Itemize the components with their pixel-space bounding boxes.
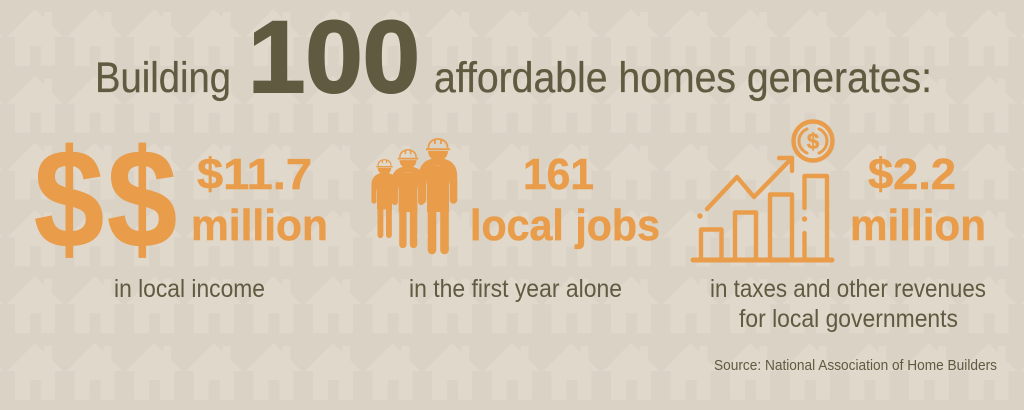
title: Building	[95, 54, 231, 102]
icon: growth chart with coin: $	[807, 129, 819, 154]
stat: local income: million	[191, 201, 328, 250]
stat: local jobs	[470, 150, 660, 250]
icon: dollar signs	[34, 120, 177, 277]
stat: tax revenue	[850, 150, 986, 250]
stat: tax revenue: $2.2	[868, 150, 956, 199]
caption: taxes: for local governments	[739, 305, 958, 333]
caption: first year: in the first year alone	[409, 275, 622, 303]
stat: tax revenue: million	[850, 201, 986, 250]
title: affordable homes generates:	[434, 54, 932, 102]
source: Source: National Association of Home Builders	[714, 358, 997, 374]
caption: local income: in local income	[114, 275, 265, 303]
stat: local jobs: 161	[523, 150, 594, 199]
icon: growth chart with coin	[693, 122, 832, 260]
caption: taxes: in taxes and other revenues	[710, 275, 986, 303]
stat: local jobs: local jobs	[470, 201, 660, 250]
icon: dollar signs: $	[34, 120, 104, 277]
title: 100	[248, 0, 420, 114]
icon: construction workers	[374, 139, 454, 250]
stat: local income	[191, 150, 328, 250]
stat: local income: $11.7	[197, 150, 312, 199]
caption: taxes	[710, 275, 986, 333]
title	[95, 0, 932, 114]
icon: dollar signs: $	[107, 120, 177, 277]
